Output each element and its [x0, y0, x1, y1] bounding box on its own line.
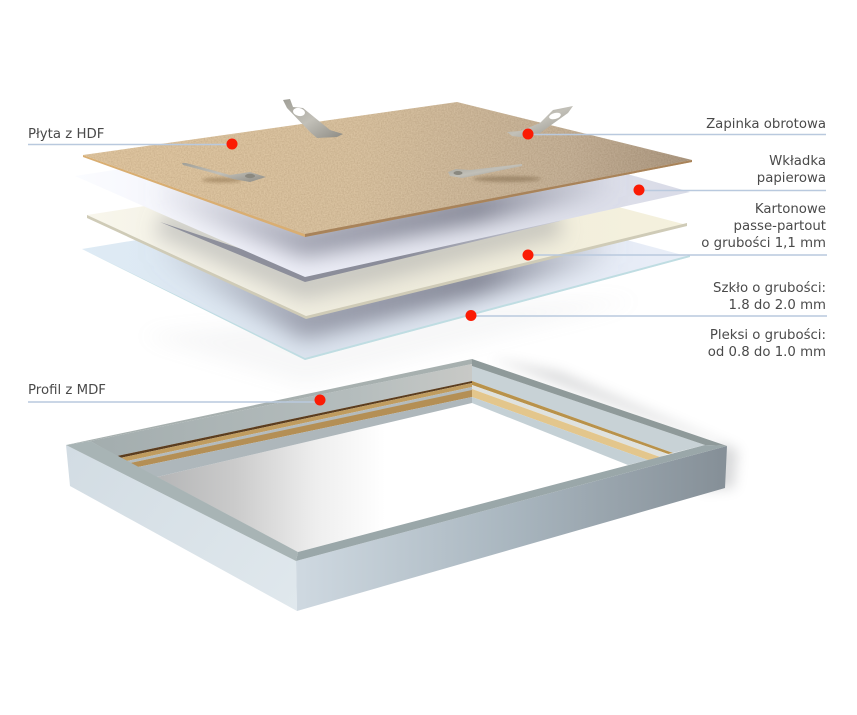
icon: lower-left clip — [182, 163, 266, 182]
callout: Płyta z HDF — [28, 127, 238, 150]
callout: Szkło i Pleksi: Pleksi o grubości: — [710, 327, 826, 343]
panel: passe-partout layer — [87, 206, 687, 319]
callout: Wkładka papierowa: Wkładka — [769, 154, 826, 169]
callout: Zapinka obrotowa: Zapinka obrotowa — [706, 117, 826, 132]
frame rim — [66, 359, 472, 445]
callout: Szkło i Pleksi: Szkło o grubości: — [713, 280, 826, 296]
infographic: exploded view of a picture frame — [28, 99, 827, 611]
frame right outer face — [296, 446, 727, 611]
icon: top-right clip — [507, 106, 573, 137]
panel: paper insert layer — [137, 174, 690, 282]
callout: Profil z MDF: Profil z MDF — [28, 383, 106, 398]
frame left outer face — [66, 445, 297, 611]
panel: HDF board — [83, 102, 692, 237]
callout: Wkładka papierowa — [634, 154, 826, 196]
icon: lower-right clip — [448, 164, 541, 182]
callout: Kartonowe passe-partout: o grubości 1,1 mm — [701, 235, 826, 251]
callout: Kartonowe passe-partout: Kartonowe — [755, 202, 826, 217]
frame opening — [157, 403, 628, 552]
frame shadow — [490, 358, 738, 490]
panel: glass layer — [82, 240, 690, 360]
callout: Profil z MDF — [28, 383, 326, 406]
frame back-left wall — [90, 364, 472, 477]
callout: Szkło i Pleksi: 1.8 do 2.0 mm — [729, 298, 826, 313]
frame back-right wall — [472, 366, 705, 465]
callout: Kartonowe passe-partout — [522, 202, 827, 260]
callout: Wkładka papierowa: papierowa — [757, 171, 826, 186]
callout: Płyta z HDF: Płyta z HDF — [28, 127, 104, 142]
callout: Szkło i Pleksi: od 0.8 do 1.0 mm — [708, 345, 826, 360]
icon: top-left clip — [283, 99, 343, 138]
panel: MDF frame — [66, 358, 738, 611]
callout: Kartonowe passe-partout: passe-partout — [734, 219, 826, 234]
callout: Zapinka obrotowa — [522, 117, 826, 140]
callout: Szkło i Pleksi — [466, 280, 827, 360]
